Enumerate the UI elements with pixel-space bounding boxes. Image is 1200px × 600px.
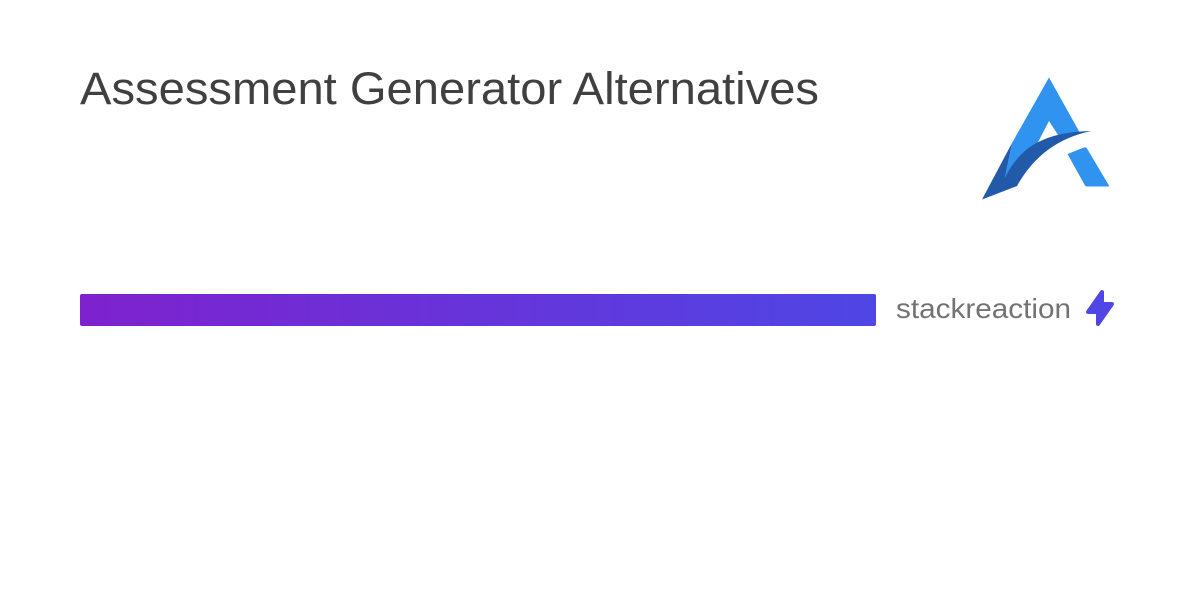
logo: right leg of A [1068, 147, 1110, 186]
logo: light blue A body [1005, 78, 1080, 178]
logo: dark blue swoosh [982, 131, 1092, 200]
icon: lightning bolt [1086, 290, 1114, 326]
title: Assessment Generator Alternatives [80, 63, 819, 114]
brand label: stackreaction [896, 293, 1071, 324]
gradient bar [80, 294, 876, 326]
icon: blue letter A logo [982, 78, 1110, 200]
